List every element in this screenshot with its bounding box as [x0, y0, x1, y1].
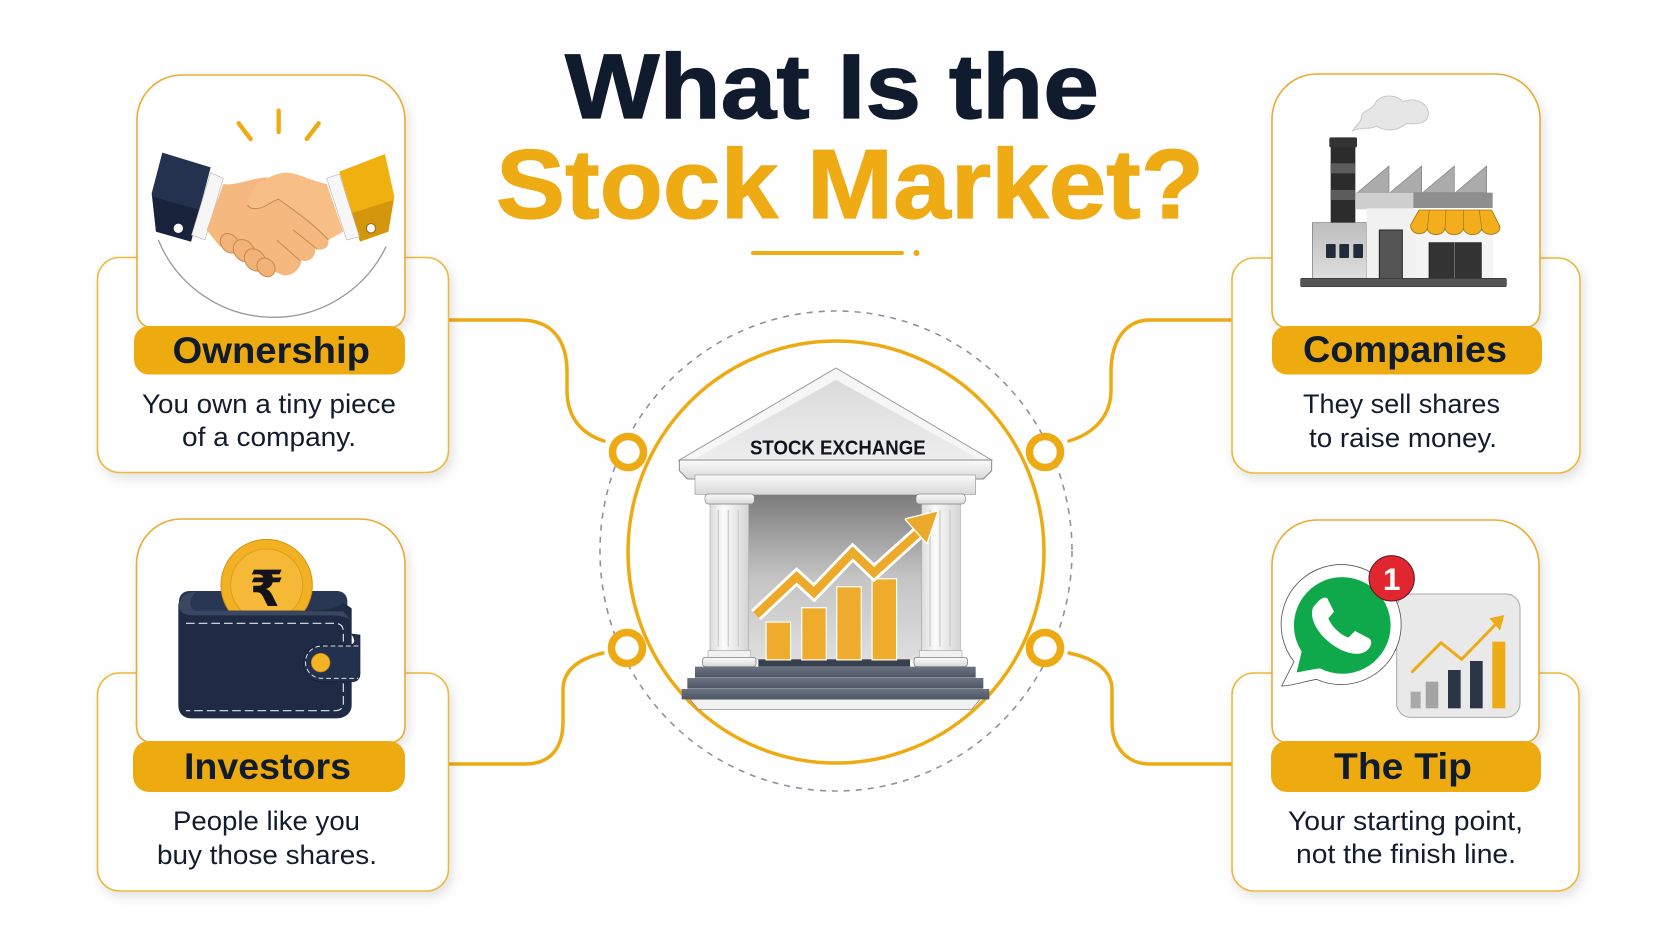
- description: buy those shares.: [157, 840, 377, 870]
- icon: wallet with rupee coin: [178, 539, 360, 718]
- icon: stock exchange building: [679, 368, 992, 709]
- icon: stock exchange building: STOCK EXCHANGE: [750, 437, 926, 459]
- heading: Investors: [184, 746, 351, 787]
- description: of a company.: [182, 422, 356, 452]
- card base: [98, 673, 448, 891]
- heading: The Tip: [1334, 746, 1472, 787]
- title: What Is the: [565, 36, 1099, 138]
- panel: companies: [1232, 74, 1580, 473]
- icon: whatsapp tip and chart: 1: [1383, 561, 1400, 597]
- panel: the tip: [1232, 520, 1579, 891]
- card base: [98, 258, 448, 472]
- icon card: [1272, 74, 1540, 328]
- description: [142, 389, 396, 452]
- card base: [1232, 258, 1580, 473]
- gold ring: [628, 341, 1044, 763]
- heading pill: [133, 741, 405, 792]
- description: [1303, 389, 1500, 453]
- icon: whatsapp tip and chart: [1281, 556, 1520, 717]
- description: They sell shares: [1303, 389, 1500, 419]
- connector lines: [448, 320, 1231, 764]
- description: Your starting point,: [1288, 806, 1523, 836]
- description: [1288, 806, 1523, 869]
- description: You own a tiny piece: [142, 389, 396, 419]
- title underline: [751, 250, 920, 256]
- description: People like you: [173, 806, 360, 836]
- title: [496, 36, 1204, 239]
- icon card: [137, 75, 405, 328]
- card base: [1232, 673, 1579, 891]
- heading pill: [1271, 741, 1541, 792]
- panel: investors: [98, 519, 448, 891]
- icon: wallet with rupee coin: ₹: [249, 560, 284, 618]
- description: to raise money.: [1309, 423, 1497, 453]
- icon card: [136, 519, 405, 743]
- heading: Ownership: [172, 330, 370, 371]
- icon: factory: [1301, 96, 1506, 287]
- heading pill: [1272, 326, 1542, 374]
- description: not the finish line.: [1296, 839, 1516, 869]
- heading: Companies: [1303, 329, 1507, 370]
- panel: ownership: [98, 75, 448, 472]
- connector nodes: [612, 436, 1060, 664]
- title: Stock Market?: [496, 129, 1204, 239]
- description: [157, 806, 377, 870]
- central hub: [600, 311, 1072, 791]
- icon card: [1272, 520, 1539, 743]
- dashed orbit: [600, 311, 1072, 791]
- icon: handshake: [152, 111, 394, 317]
- heading pill: [134, 326, 405, 374]
